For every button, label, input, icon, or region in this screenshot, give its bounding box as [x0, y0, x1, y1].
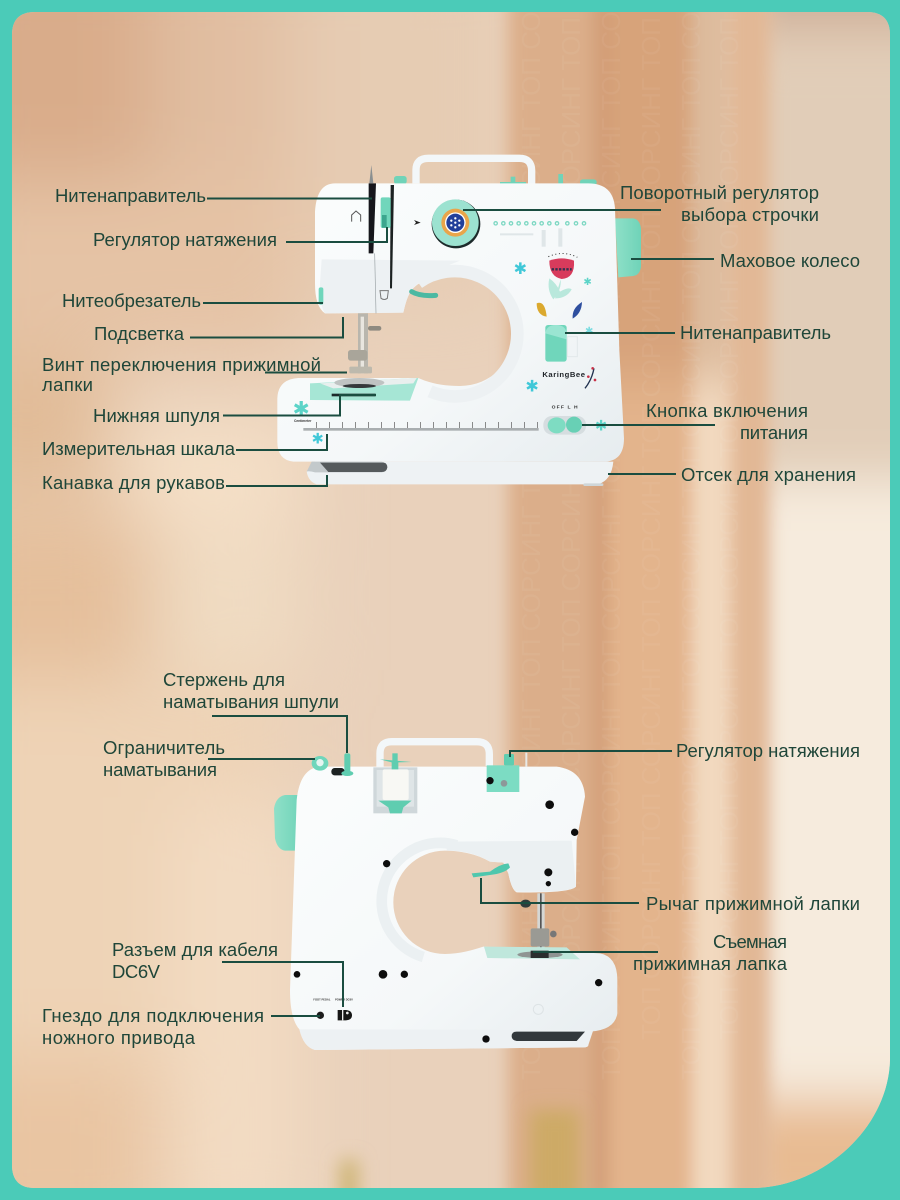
faint watermark columns: [516, 0, 744, 1080]
removable plate: [484, 947, 580, 959]
flower decoration: [548, 253, 577, 299]
labels: front view right: Отсек для хранения: [681, 464, 856, 485]
ruler: Centimeter: [294, 419, 312, 423]
foot pedal socket: [313, 998, 331, 1019]
labels: front view left: Нитеобрезатель: [62, 290, 201, 311]
DC power socket: POWER DC6V: [335, 998, 353, 1002]
labels: front view right: [620, 182, 860, 485]
rear tension box: [486, 753, 527, 792]
stitch pattern dots: [494, 222, 586, 225]
blue and yellow leaves, stars: ✱: [525, 378, 539, 395]
power switch: [543, 405, 586, 435]
labels: front view left: Нижняя шпуля: [93, 405, 220, 426]
labels: rear view left: наматывания: [103, 759, 217, 780]
labels: front view right: Кнопка включения: [646, 400, 808, 421]
labels: rear view left: Ограничитель: [103, 737, 225, 758]
labels: front view left: Канавка для рукавов: [42, 472, 225, 493]
blue and yellow leaves, stars: ✱: [585, 326, 593, 337]
winder spindle: [331, 753, 353, 776]
leader lines: rear view: [208, 716, 672, 1016]
blue and yellow leaves, stars: ✱: [595, 419, 607, 435]
brand logo: [542, 367, 596, 388]
power switch: OFF L H: [552, 405, 578, 411]
labels: front view right: выбора строчки: [681, 204, 819, 225]
base storage: [307, 462, 613, 484]
labels: front view left: Винт переключения прижимной: [42, 354, 321, 375]
blue and yellow leaves, stars: ✱: [583, 277, 592, 288]
labels: front view right: Маховое колесо: [720, 250, 860, 271]
bobbin winder stop: [312, 756, 328, 771]
machine body: [290, 767, 617, 1050]
sewing machine: rear view: [274, 742, 617, 1050]
handle: [380, 742, 489, 767]
blue and yellow leaves, stars: ✱: [312, 431, 324, 447]
handwheel: [274, 795, 302, 851]
small marks on head: [352, 211, 361, 222]
sewing machine: front view: [277, 158, 641, 486]
arm shading: [382, 841, 576, 957]
labels: front view right: Нитенаправитель: [680, 322, 831, 343]
labels: front view left: [42, 185, 321, 493]
lever: [412, 292, 436, 296]
foot pedal socket: FOOT PEDAL: [313, 998, 331, 1002]
stitch selector dial: [432, 199, 480, 248]
labels: rear view left: [42, 669, 339, 1048]
leader lines: front view: [190, 198, 715, 486]
thread channel: [369, 183, 376, 253]
brand logo: KaringBee: [542, 370, 585, 379]
labels: rear view right: [633, 740, 860, 974]
blue and yellow leaves, stars: ✱: [514, 261, 527, 278]
ruler: [294, 419, 539, 431]
labels: rear view right: Съемная: [713, 931, 787, 952]
labels: front view left: Регулятор натяжения: [93, 229, 277, 250]
labels: rear view right: Рычаг прижимной лапки: [646, 893, 860, 914]
labels: front view left: лапки: [42, 374, 93, 395]
labels: front view left: Подсветка: [94, 323, 185, 344]
labels: rear view left: DC6V: [112, 961, 161, 982]
spool holder: [373, 753, 417, 813]
labels: front view left: Нитенаправитель: [55, 185, 206, 206]
handwheel: [615, 218, 641, 277]
tension dial: [381, 197, 391, 228]
labels: front view left: Измерительная шкала: [42, 438, 236, 459]
blue and yellow leaves, stars: [293, 261, 607, 447]
machine body: [277, 183, 624, 462]
blue and yellow leaves, stars: ✱: [293, 398, 310, 421]
left mint trim: [319, 287, 323, 305]
needle plate: [310, 378, 418, 401]
sleeve slot: [512, 1032, 585, 1041]
DC power socket: [335, 998, 353, 1020]
screw holes: [294, 800, 602, 1043]
labels: rear view left: Гнездо для подключения: [42, 1005, 264, 1026]
labels: rear view left: Стержень для: [163, 669, 285, 690]
labels: front view right: Поворотный регулятор: [620, 182, 819, 203]
arm shading: [320, 259, 517, 396]
labels: rear view left: ножного привода: [42, 1027, 196, 1048]
top knobs: [394, 174, 597, 185]
labels: rear view left: Разъем для кабеля: [112, 939, 278, 960]
base band: [299, 1029, 593, 1050]
presser lever: [472, 863, 510, 877]
handle: [416, 158, 532, 185]
feet: [583, 483, 603, 486]
labels: rear view right: Регулятор натяжения: [676, 740, 860, 761]
needle assembly: [348, 313, 381, 373]
thread guide: [545, 325, 577, 362]
labels: rear view left: наматывания шпули: [163, 691, 339, 712]
labels: rear view right: прижимная лапка: [633, 953, 788, 974]
presser foot: [520, 893, 557, 950]
labels: front view right: питания: [740, 422, 808, 443]
